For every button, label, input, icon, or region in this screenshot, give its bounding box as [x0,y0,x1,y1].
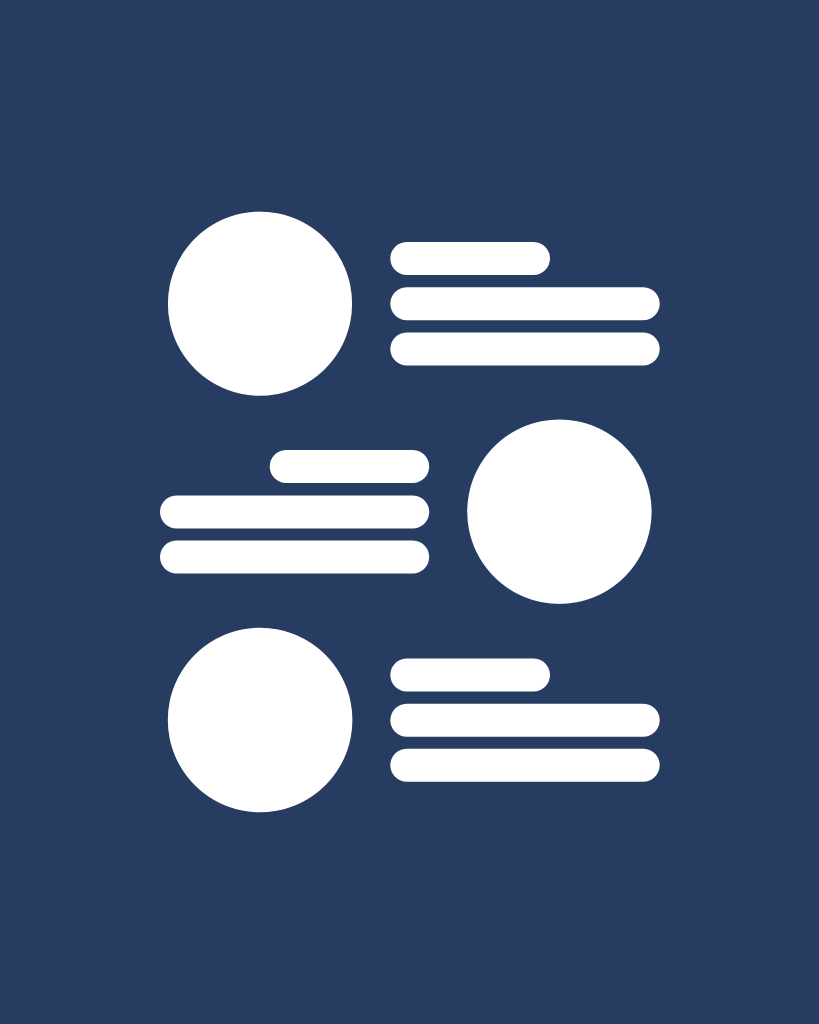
placeholder bar 1 long [390,287,660,320]
placeholder bar 2 long [160,496,429,528]
placeholder bar 1 long second [390,332,660,366]
placeholder bar 3 long second [390,749,660,782]
circle 1 [168,212,352,396]
row 3: circle with text placeholders [168,628,660,812]
circle 3 [168,628,352,812]
placeholder bar 2 short [270,450,429,483]
circle 2 [467,420,652,604]
row 1: circle with text placeholders [168,212,660,396]
placeholder bar 2 long second [160,540,429,574]
placeholder bar 3 short [390,658,550,692]
placeholder bar 3 long [390,704,660,737]
row 2: text placeholders with circle [160,420,652,604]
placeholder bar 1 short [390,242,550,275]
